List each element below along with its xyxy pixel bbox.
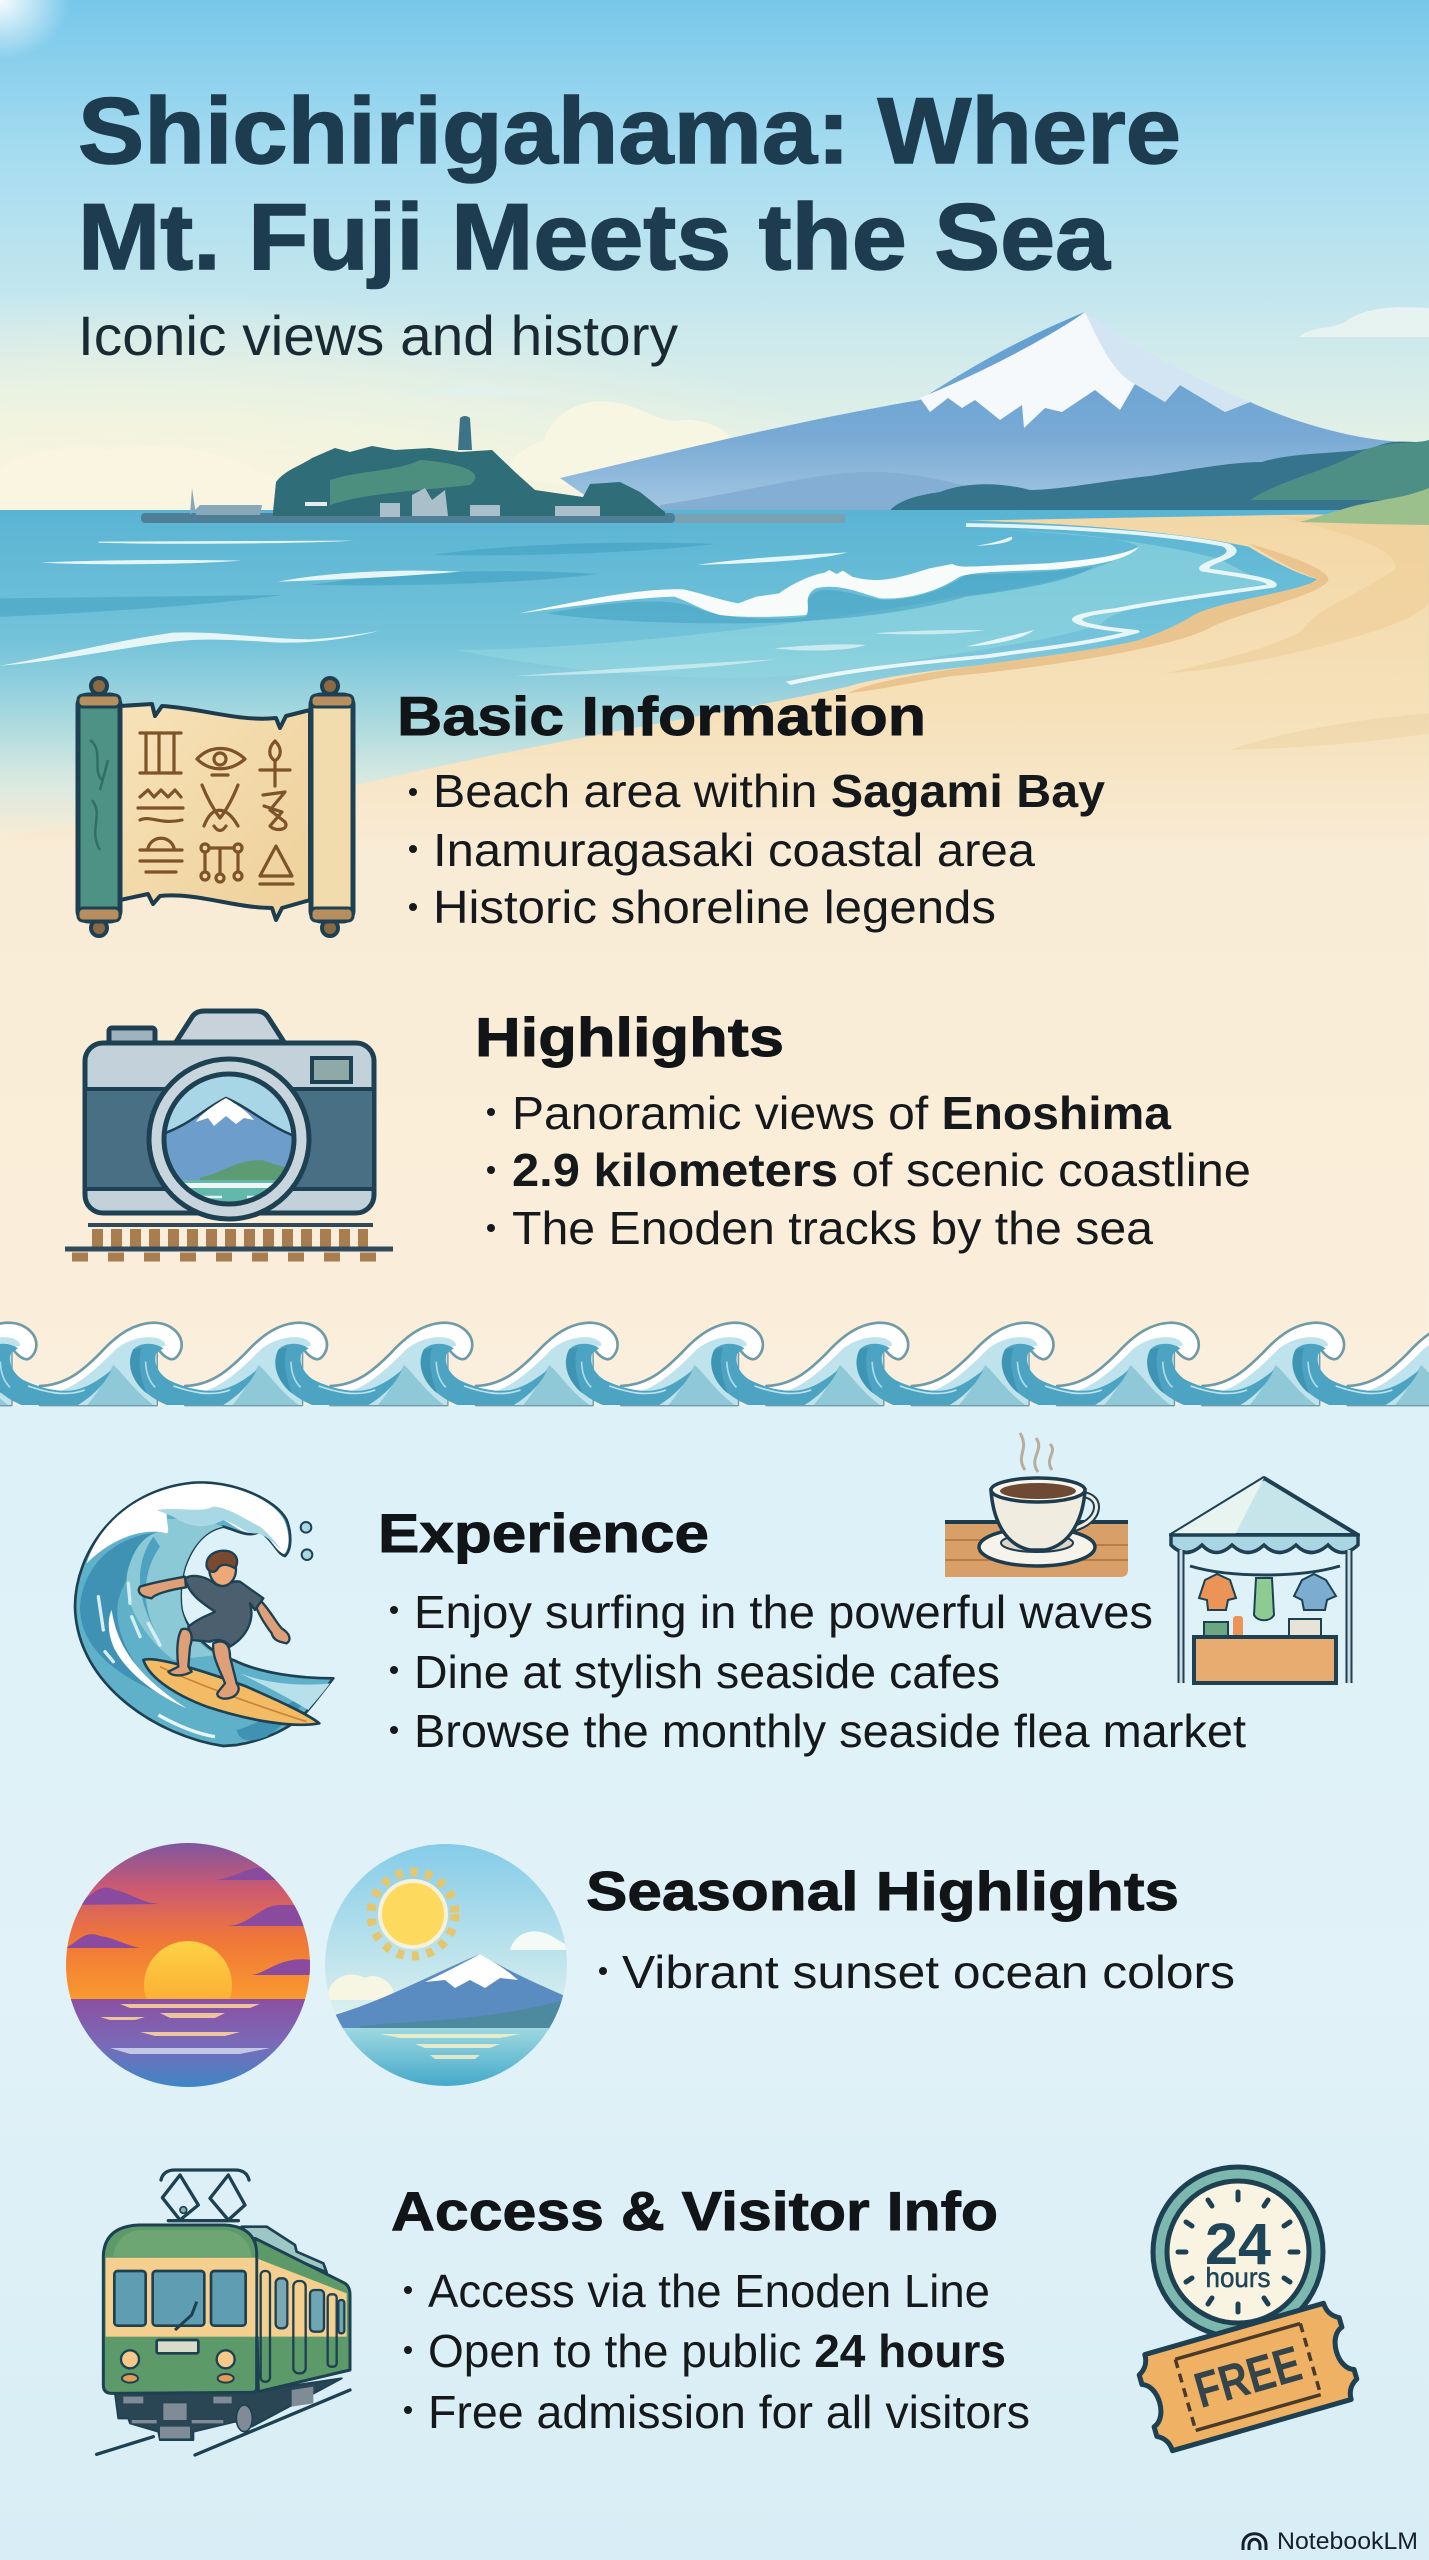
ticket label: FREE [1188,2335,1308,2419]
green hills [884,440,1429,520]
bullet list: Panoramic views of Enoshima [512,1087,1171,1139]
icon: flea market stall [1171,1478,1358,1683]
bullet list: Enjoy surfing in the powerful waves [414,1586,1153,1638]
icon: sunset over sea [60,1840,320,2089]
bullet list [390,1586,1246,1757]
bullet list: The Enoden tracks by the sea [512,1202,1153,1254]
bullet list [409,765,1105,933]
bullet list [404,2265,1030,2438]
heading: Access & Visitor Info [391,2180,998,2242]
wave body [75,1482,333,1746]
surfboard [143,1659,319,1725]
clouds [0,307,1429,510]
wet sand band [848,543,1328,693]
icon: coffee cup on table [945,1433,1128,1577]
sea [0,510,1429,840]
heading: Basic Information [397,685,926,747]
beach sand [0,513,1429,1407]
section: access and visitor info [391,2180,1030,2438]
heading: Highlights [475,1006,784,1068]
spray drops [301,1522,311,1533]
crest foam [87,1484,288,1563]
section: highlights [475,1006,1251,1254]
icon: camera on tracks [65,1011,393,1257]
icon: ancient scroll [78,678,353,936]
icon: 24 hours clock: hours [1206,2262,1270,2293]
surfer [139,1551,289,1699]
bullet list: Dine at stylish seaside cafes [414,1646,1000,1698]
bullet: Vibrant sunset ocean colors [622,1946,1235,1998]
icon: sunny Mt. Fuji scene [320,1840,575,2090]
bullet list: 2.9 kilometers of scenic coastline [512,1144,1251,1196]
Mt. Fuji [560,312,1429,520]
icon: Enoden train [97,2170,350,2455]
rails [97,2390,350,2455]
roof details [242,2227,327,2272]
front of car [103,2225,257,2393]
undercarriage [115,2378,342,2440]
illustration: beach landscape with Mt. Fuji and Enoshima [0,0,1429,1407]
lens with Fuji view [166,1076,292,1202]
title: Mt. Fuji Meets the Sea [78,184,1111,289]
dark water [0,543,715,617]
sun [371,1872,455,1956]
bullet list: Inamuragasaki coastal area [433,824,1035,876]
bullet list: Access via the Enoden Line [428,2265,990,2317]
Enoshima island [141,416,845,523]
bullet list: Browse the monthly seaside flea market [414,1705,1246,1757]
lower blue panel [0,1405,1429,2560]
bullet list: Free admission for all visitors [428,2386,1030,2438]
bullet list: Historic shoreline legends [433,881,996,933]
section: seasonal highlights [586,1860,1235,1998]
NotebookLM logo: NotebookLM [1277,2528,1418,2555]
water highlights [0,537,1034,676]
section: experience [378,1502,1246,1757]
side of car [255,2238,350,2392]
shoreline foam [788,525,1272,683]
heading: Seasonal Highlights [586,1860,1179,1922]
clock label: 24 [1205,2212,1271,2277]
title [78,78,1181,289]
subtitle: Iconic views and history [78,304,678,367]
icon: surfer on wave [75,1482,333,1746]
shallow water [456,530,1267,678]
pantograph [161,2170,249,2221]
icon: 24 hours clock [1153,2167,1323,2337]
sand and sea details [0,513,1429,1407]
heading: Experience [378,1502,709,1564]
bullet list: Open to the public 24 hours [428,2325,1006,2377]
icon: free ticket [1134,2300,1362,2454]
breaking wave [519,547,1139,617]
railway tracks [65,1225,393,1257]
sky [0,0,1429,512]
bullet list [487,1087,1251,1254]
section: basic information [397,685,1105,933]
title: Shichirigahama: Where [78,78,1181,183]
bullet list: Beach area within Sagami Bay [433,765,1105,817]
decorative wave divider [0,1323,1429,1405]
scroll glyphs [138,733,293,884]
